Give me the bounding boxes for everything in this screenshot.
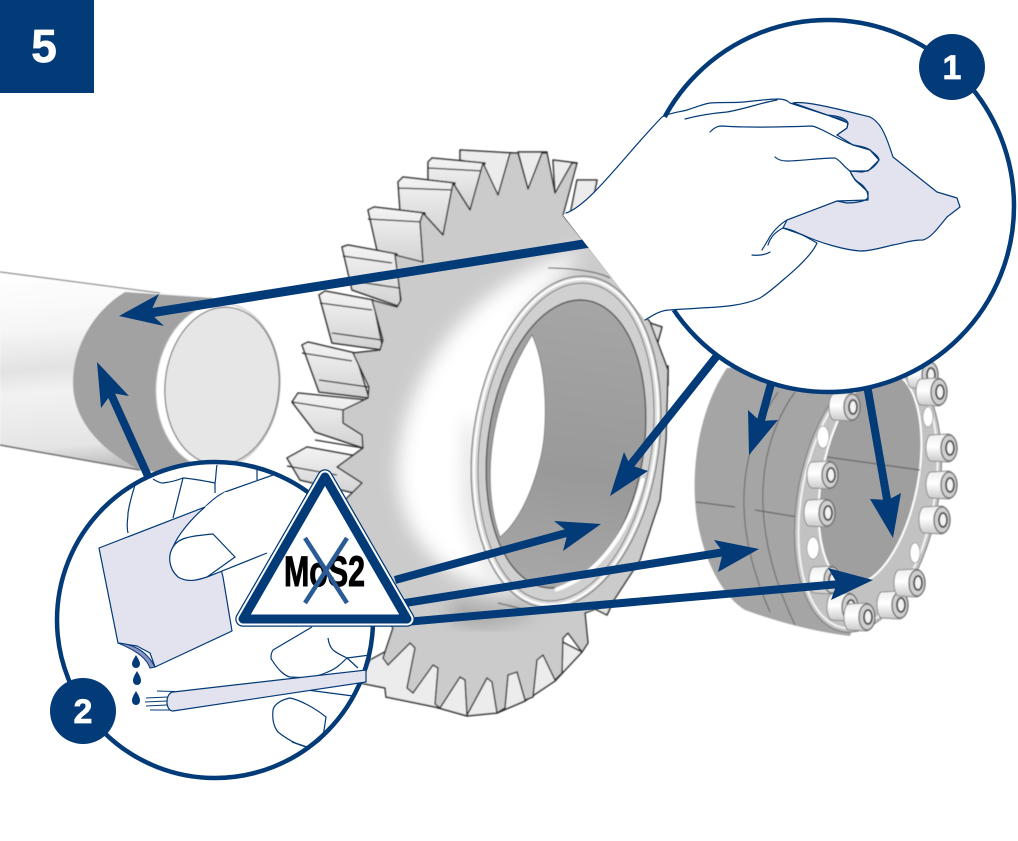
warning triangle: no MoS2 <box>243 477 407 619</box>
arrow: to ring bore from circle 1 <box>867 385 901 538</box>
ring outer body <box>695 360 905 636</box>
arrow: to ring bore from warning <box>405 568 873 622</box>
solvent drops <box>132 655 141 705</box>
gear teeth rear lands <box>287 150 668 716</box>
thumb <box>170 490 280 580</box>
number badge 1: 1 <box>943 49 961 87</box>
lower fingers <box>271 627 370 748</box>
gear front face <box>337 153 668 715</box>
arrow: to ring outer surface from warning <box>405 540 759 603</box>
ring holes <box>807 407 933 563</box>
arrow: to shaft band from circle 2 <box>97 362 152 485</box>
bore outer ring <box>451 264 681 620</box>
number badge 2 <box>50 678 116 744</box>
clamping ring with bolts <box>695 349 963 645</box>
brush <box>167 670 366 711</box>
step number badge 5 <box>0 0 94 93</box>
arrow: to gear bore from warning <box>395 521 601 580</box>
gear hub highlight <box>398 250 585 590</box>
arrow: to ring outer from circle 1 <box>748 380 778 455</box>
bore inner surface <box>469 290 663 598</box>
number badge 2: 2 <box>74 693 92 731</box>
arrow: to shaft band from circle 1 <box>119 243 590 326</box>
cloth fold <box>118 643 155 668</box>
hand cracks <box>127 465 273 533</box>
arrow: to gear bore from circle 1 <box>610 352 720 496</box>
hub shading <box>465 419 540 608</box>
ring inner bore <box>802 363 938 593</box>
ring front flange <box>773 349 963 645</box>
solvent cloth <box>99 507 232 667</box>
MoS2 label: MoS2 <box>284 548 365 596</box>
shaft <box>0 272 287 480</box>
cleaned grey band <box>73 292 222 480</box>
shaft end face <box>149 298 287 474</box>
cloth <box>783 103 960 251</box>
step number badge 5: 5 <box>31 20 57 72</box>
gear tooth land lines <box>287 168 483 475</box>
hand outline <box>566 99 879 320</box>
brush bristles <box>145 691 175 710</box>
ring bolts <box>804 361 957 631</box>
circle 1: wiping with cloth <box>563 20 1014 392</box>
circle 2: applying solvent <box>57 462 373 778</box>
number badge 1 <box>919 34 985 100</box>
crossing-out X <box>305 538 347 603</box>
magnifier cone <box>563 115 730 320</box>
gear <box>287 150 681 716</box>
bore see-through <box>490 335 545 537</box>
